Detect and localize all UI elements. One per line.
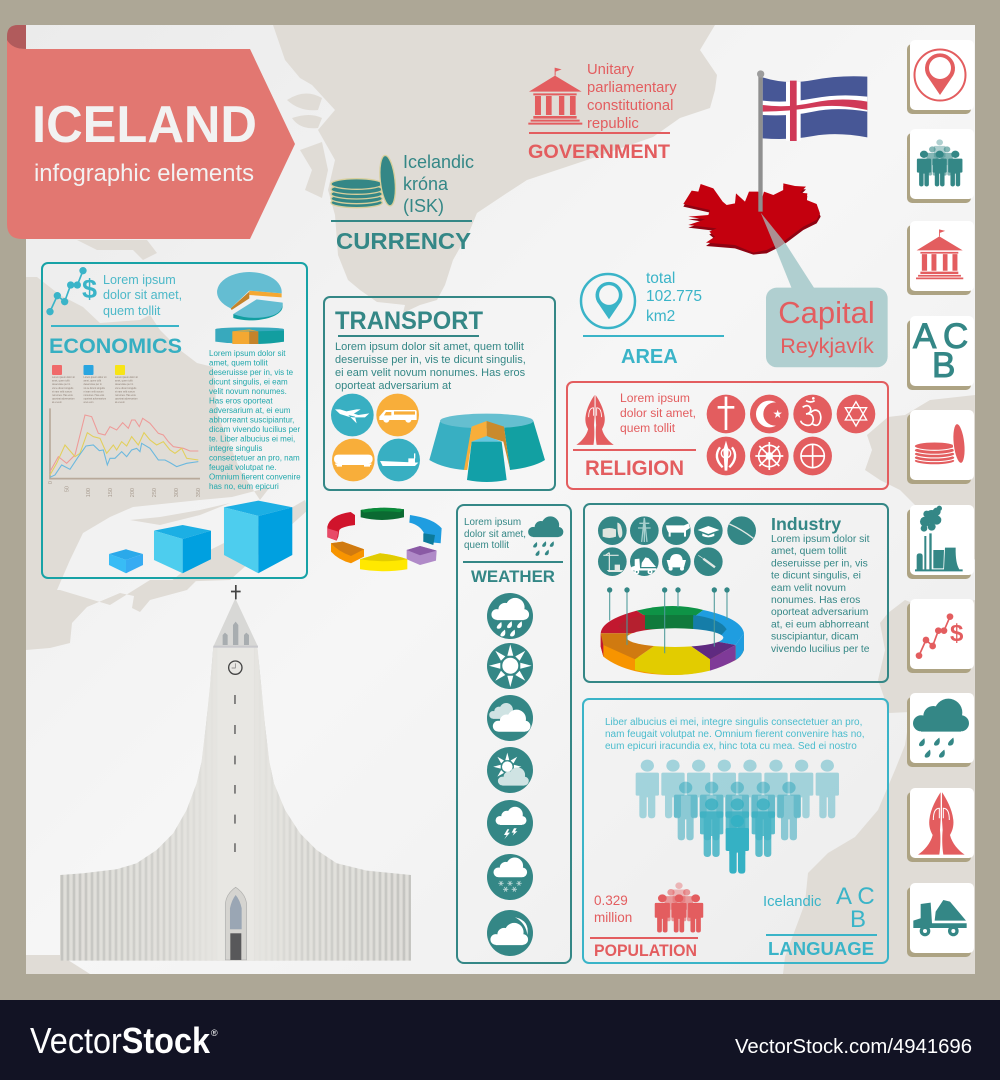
industry text: te dicunt singulis, ei <box>771 571 861 582</box>
chart legend: at ei eum <box>52 401 62 404</box>
chart axis labels: 350 <box>196 488 202 497</box>
line chart <box>50 408 200 479</box>
government text: constitutional <box>587 98 673 114</box>
capital label: Capital <box>778 295 875 330</box>
cross <box>231 585 241 599</box>
icon: cargo ship <box>377 439 420 481</box>
callout pointer <box>761 213 814 288</box>
chart legend: amet, quem tollit <box>52 380 70 383</box>
economics body text: dicunt singulis, ei eam <box>209 378 288 386</box>
icon: sun <box>487 643 533 689</box>
church wings <box>60 647 411 961</box>
icon: population group <box>655 882 703 933</box>
chart legend: deseruisse per in <box>115 383 134 386</box>
ribbon fold <box>7 25 26 49</box>
icon: cross <box>707 395 745 433</box>
icon: night <box>487 910 533 956</box>
panel: weather <box>457 505 571 963</box>
area block <box>581 270 724 368</box>
icon: sun and cloud <box>487 747 533 793</box>
chart legend: amet, quem tollit <box>84 380 101 383</box>
3D pie chart <box>215 272 284 344</box>
footer brand: VectorStock <box>30 1020 211 1061</box>
chart axis labels <box>48 481 202 497</box>
area text: km2 <box>646 308 675 325</box>
tile: religion <box>907 788 974 862</box>
chart legend: nonumes. Has eros <box>52 394 74 397</box>
religion text: quem tollit <box>620 421 676 435</box>
ribbon title banner <box>7 25 295 239</box>
icon: parliament building <box>528 68 582 125</box>
icon: coins <box>598 516 627 545</box>
Hallgrimskirkja church illustration <box>60 585 411 961</box>
chart legend: Lorem ipsum dolor sit <box>52 376 75 379</box>
icon: crane and ship <box>598 547 627 576</box>
chart legend: deseruisse per in <box>84 383 102 386</box>
economics body text: feugait volutpat ne. <box>209 463 277 472</box>
tile: government <box>907 221 974 295</box>
industry text: deseruisse per in, vis <box>771 558 868 569</box>
icon: bus <box>376 394 419 436</box>
industry text: Lorem ipsum dolor sit <box>771 534 870 545</box>
chart legend: ei eam velit novum <box>52 390 72 393</box>
chart axis labels: 150 <box>108 488 114 497</box>
tile: economics <box>907 599 974 673</box>
footer bar <box>0 1000 1000 1080</box>
flag <box>763 76 867 141</box>
chart legend: deseruisse per in <box>52 383 71 386</box>
currency heading: CURRENCY <box>336 228 471 254</box>
chart axis labels: 100 <box>86 488 92 497</box>
icon: rain cloud <box>528 516 563 556</box>
economics body text: adversarium at, ei eum <box>209 406 291 415</box>
transport heading: TRANSPORT <box>335 307 483 335</box>
weather intro text: Lorem ipsum <box>464 517 521 528</box>
chart legend: Lorem ipsum dolor sit <box>84 376 107 379</box>
weather intro text: quem tollit <box>464 540 509 551</box>
icon column tiles <box>907 40 974 957</box>
chart legend: vis te dicunt singulis <box>84 387 106 390</box>
industry text: nonumes. Has eros <box>771 595 860 606</box>
population figure: 0.329 <box>594 893 628 908</box>
government block <box>528 62 677 163</box>
clock <box>229 661 242 674</box>
economics intro text: dolor sit amet, <box>103 288 182 302</box>
currency block <box>331 152 474 254</box>
government text: parliamentary <box>587 80 677 96</box>
icon: mining truck <box>630 547 659 576</box>
transport text: deseruisse per in, vis te dicunt singulis, <box>335 354 526 366</box>
subtitle: infographic elements <box>34 160 254 187</box>
religious symbols <box>707 395 875 475</box>
icon: thunderstorm <box>487 800 533 846</box>
chart legend: at ei eum <box>84 401 93 404</box>
economics body text: Has eros oporteat <box>209 396 273 406</box>
icon: overcast <box>487 695 533 741</box>
tower windows <box>234 695 236 852</box>
transport icons <box>331 394 545 482</box>
capital callout <box>766 288 888 367</box>
icon: rain <box>487 593 533 639</box>
capital label <box>778 295 875 358</box>
icon: coal cart <box>662 547 691 576</box>
panel: transport <box>324 297 555 490</box>
chart legend <box>52 365 138 404</box>
icon: circled cross <box>793 437 832 475</box>
icon: cow <box>662 516 691 545</box>
3D cone chart <box>429 414 545 482</box>
ring chart with pins <box>601 587 744 675</box>
tile: language: B <box>932 346 955 385</box>
panel: industry <box>584 504 888 682</box>
flag pole <box>758 74 763 212</box>
tile: language: C <box>943 317 968 356</box>
spire <box>213 598 258 647</box>
icon: graduation cap <box>694 516 723 545</box>
icon: om <box>793 395 832 433</box>
panel: economics <box>42 263 307 578</box>
tile: currency <box>907 410 974 484</box>
tile: population <box>907 129 974 203</box>
capital label: Reykjavík <box>780 333 874 358</box>
language heading: LANGUAGE <box>768 938 874 959</box>
religion text: Lorem ipsum <box>620 391 690 405</box>
title: ICELAND <box>32 96 257 154</box>
industry text: vivendo lucilius per te <box>771 644 870 655</box>
religion text: dolor sit amet, <box>620 406 696 420</box>
chart legend: oporteat adversarium <box>52 398 75 401</box>
icon: power pylon <box>630 516 659 545</box>
population text: eum epicuri iracundia ex, hinc tota cu mea. Sed ei nostro <box>605 741 857 752</box>
economics body text: abhorreant suscipiantur, <box>209 416 294 424</box>
tile: language <box>907 316 974 390</box>
weather heading: WEATHER <box>471 567 555 586</box>
population figure: million <box>594 910 632 925</box>
icon: plane <box>331 394 374 436</box>
icon: snow <box>487 854 533 900</box>
industry text: at, ei eum abhorreant <box>771 619 869 630</box>
currency text: Icelandic <box>403 152 474 172</box>
icon: letters: A C <box>836 883 875 910</box>
area heading: AREA <box>621 346 678 368</box>
icon: dharma wheel <box>750 437 789 475</box>
church door <box>225 887 247 960</box>
icon: letters <box>836 883 875 933</box>
economics body text: Lorem ipsum dolor sit <box>209 349 286 358</box>
icon: crescent and star <box>750 395 789 433</box>
government text: Unitary <box>587 62 634 78</box>
chart axis labels: 300 <box>174 488 180 497</box>
panel: religion <box>567 382 888 489</box>
currency text: króna <box>403 174 449 194</box>
icon: growth chart and dollar: $ <box>82 274 97 304</box>
tile: industry <box>907 505 974 579</box>
icon: tanker train <box>332 439 375 481</box>
tile: language: A <box>913 317 937 356</box>
chart legend: ei eam velit novum <box>84 390 103 393</box>
3D cube chart <box>109 501 292 573</box>
Iceland shadow <box>683 186 821 255</box>
chart axis labels: 200 <box>130 488 136 497</box>
chart legend: oporteat adversarium <box>84 398 106 401</box>
economics body text: integre singulis <box>209 444 262 453</box>
chart axis labels: 250 <box>152 488 158 497</box>
chart legend: oporteat adversarium <box>115 398 138 401</box>
economics heading: ECONOMICS <box>49 335 182 358</box>
chart legend: ei eam velit novum <box>115 390 135 393</box>
area text: total <box>646 270 675 287</box>
people pictogram <box>636 760 839 874</box>
chart axis labels: 50 <box>64 486 70 492</box>
economics body text: velit novum nonumes. <box>209 387 287 396</box>
chart legend: amet, quem tollit <box>115 380 133 383</box>
icon: location pin <box>581 274 635 328</box>
chart legend: nonumes. Has eros <box>115 394 137 397</box>
footer bar: ® <box>211 1028 218 1038</box>
weather intro text: dolor sit amet, <box>464 529 526 540</box>
tile: economics: $ <box>950 620 964 647</box>
government text: republic <box>587 116 639 132</box>
industry text: amet, quem tollit <box>771 546 847 557</box>
transport text: oporteat adversarium at <box>335 380 451 392</box>
chart legend: vis te dicunt singulis <box>52 387 74 390</box>
economics body text: Omnium fierent convenire <box>209 472 301 482</box>
church tower <box>217 647 254 961</box>
icon: letters: B <box>850 906 866 933</box>
population text: Liber albucius ei mei, integre singulis consectetuer an pro, <box>605 717 862 728</box>
Iceland map <box>683 183 820 253</box>
tile: location <box>907 40 974 114</box>
icon: growth chart and dollar <box>46 267 97 315</box>
economics body text: te. Liber albucius ei mei, <box>209 434 295 444</box>
icon: praying hands <box>576 395 614 445</box>
chart legend: nonumes. Has eros <box>84 394 105 397</box>
transport text: Lorem ipsum dolor sit amet, quem tollit <box>335 341 524 353</box>
icon: syringe <box>694 547 723 576</box>
industry text: oporteat adversarium <box>771 607 868 618</box>
footer image id: VectorStock.com/4941696 <box>735 1036 972 1058</box>
area text: 102.775 <box>646 288 702 305</box>
population text: nam feugait volutpat ne. Omnium fierent convenire has no, <box>605 729 865 740</box>
economics body text: consectetuer an pro, nam <box>209 454 300 462</box>
panel: population and language <box>583 699 888 963</box>
economics body text: amet, quem tollit <box>209 358 268 368</box>
ring chart: colored segments <box>327 508 442 571</box>
icon: star of David <box>837 395 875 433</box>
industry heading: Industry <box>771 514 841 534</box>
economics body text: has no, eum epicuri <box>209 482 279 491</box>
transport text: ei eam velit novum nonumes. Has eros <box>335 367 526 379</box>
chart axis labels: 0 <box>48 481 54 484</box>
language name: Icelandic <box>763 894 822 910</box>
government heading: GOVERNMENT <box>528 141 670 163</box>
tile: weather <box>907 693 974 767</box>
economics intro text: Lorem ipsum <box>103 273 176 287</box>
economics body text: deseruisse per in, vis te <box>209 368 294 377</box>
industry text: eam velit novum <box>771 583 846 594</box>
economics intro text: quem tollit <box>103 304 161 318</box>
map of Iceland with flag and capital callout <box>683 70 888 367</box>
tile: truck <box>907 883 974 957</box>
icon: khanda <box>707 437 745 475</box>
icon: fishing rod <box>727 516 756 545</box>
currency text: (ISK) <box>403 196 444 216</box>
religion heading: RELIGION <box>585 457 684 480</box>
economics body text: dicam vivendo lucilius per <box>209 425 300 434</box>
industry icons <box>598 516 756 675</box>
population heading: POPULATION <box>594 942 697 960</box>
chart legend: Lorem ipsum dolor sit <box>115 376 138 379</box>
chart legend: at ei eum <box>115 401 125 404</box>
industry text: suscipiantur, dicam <box>771 632 859 643</box>
chart legend: vis te dicunt singulis <box>115 387 137 390</box>
icon: coins <box>331 155 398 208</box>
